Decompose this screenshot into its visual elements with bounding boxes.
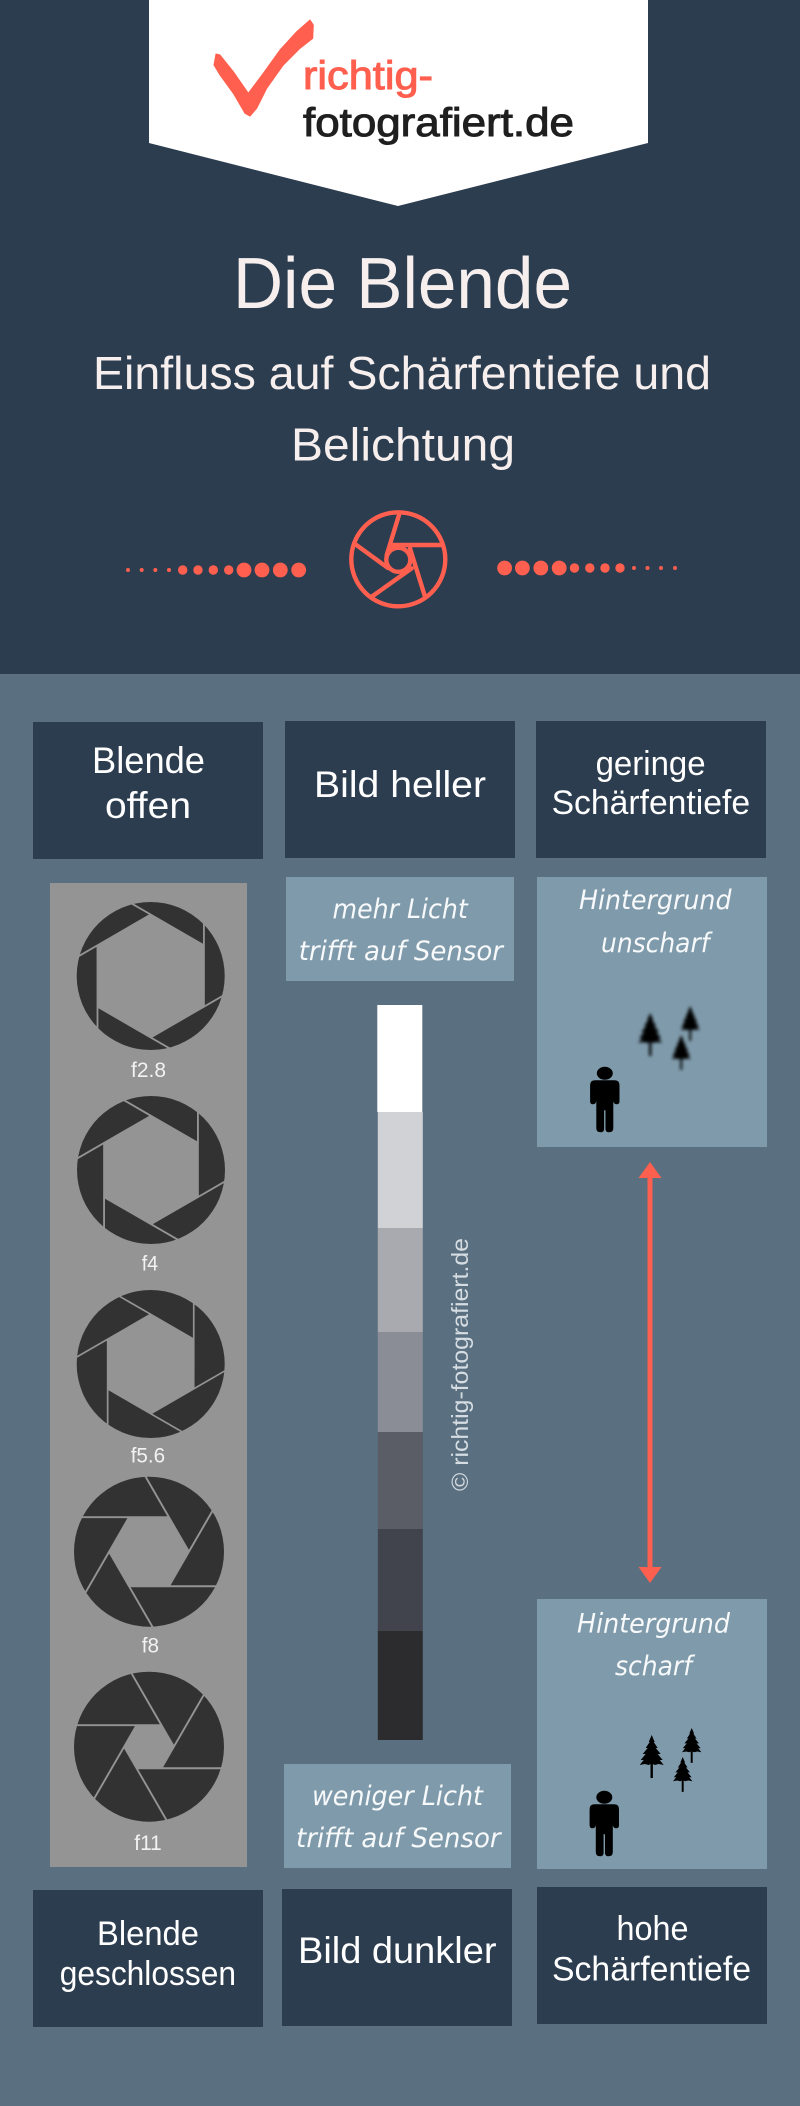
- icon: person: [590, 1791, 619, 1856]
- panel: geringe Schärfentiefe: geringe: [596, 745, 706, 783]
- panel: hohe Schärfentiefe: Schärfentiefe: [552, 1951, 751, 1989]
- callout: mehr Licht: [286, 877, 514, 981]
- panel: Hintergrund scharf: scharf: [615, 1651, 695, 1682]
- aperture f2.8: [76, 902, 225, 1077]
- dots left: [126, 563, 306, 577]
- panel: hohe Schärfentiefe: hohe: [616, 1910, 688, 1948]
- aperture f8: f8: [142, 1635, 159, 1658]
- panel: Blende geschlossen: Blende: [97, 1915, 199, 1953]
- panel: Blende offen: offen: [105, 785, 191, 826]
- aperture f2.8: f2.8: [131, 1059, 166, 1082]
- panel: Hintergrund scharf: [537, 1599, 767, 1869]
- aperture f4: [77, 1096, 225, 1270]
- panel: Bild heller: [285, 721, 515, 858]
- aperture f5.6: [76, 1290, 225, 1462]
- panel: Blende geschlossen: geschlossen: [60, 1955, 236, 1993]
- subtitle: [93, 347, 711, 470]
- panel: geringe Schärfentiefe: Schärfentiefe: [552, 784, 750, 822]
- logo text: fotografiert.de: [303, 101, 574, 145]
- callout: mehr Licht: mehr Licht: [332, 894, 469, 925]
- panel: Blende offen: [33, 722, 263, 859]
- panel: Bild dunkler: [282, 1889, 512, 2026]
- subtitle: Belichtung: [291, 418, 515, 470]
- icon: person: [590, 1067, 620, 1132]
- header band: [0, 0, 800, 674]
- logo text: [303, 54, 574, 145]
- logo text: richtig-: [303, 54, 433, 98]
- panel: Hintergrund unscharf: [537, 877, 767, 1147]
- callout: weniger Licht: trifft auf Sensor: [296, 1823, 502, 1854]
- copyright watermark: © richtig-fotografiert.de: [447, 1238, 473, 1491]
- panel: Bild dunkler: Bild dunkler: [298, 1930, 496, 1971]
- aperture f8: [74, 1476, 224, 1652]
- panel: Hintergrund unscharf: Hintergrund: [579, 885, 732, 916]
- aperture f11: f11: [134, 1832, 162, 1855]
- panel: Hintergrund scharf: Hintergrund: [577, 1609, 731, 1640]
- title: Die Blende: [233, 244, 572, 324]
- callout: weniger Licht: [284, 1764, 511, 1868]
- icon: blurred trees: [638, 1006, 700, 1070]
- panel: geringe Schärfentiefe: [536, 721, 766, 858]
- panel: hohe Schärfentiefe: [537, 1887, 767, 2024]
- aperture f11: [74, 1672, 224, 1850]
- aperture f5.6: f5.6: [131, 1445, 165, 1468]
- callout: weniger Licht: weniger Licht: [312, 1781, 484, 1812]
- brightness scale: [377, 1005, 423, 1740]
- panel: Bild heller: Bild heller: [314, 764, 486, 805]
- panel: Blende offen: Blende: [92, 740, 205, 781]
- logo banner: [149, 0, 648, 206]
- icon: aperture: [351, 512, 445, 606]
- panel: Blende geschlossen: [33, 1890, 263, 2027]
- aperture f4: f4: [142, 1253, 159, 1276]
- arrow: double-headed depth of field: [638, 1162, 662, 1583]
- icon: sharp trees: [640, 1728, 701, 1792]
- icon: logo check mark: [214, 20, 313, 116]
- panel: aperture column: [50, 883, 247, 1867]
- subtitle: Einfluss auf Schärfentiefe und: [93, 347, 711, 399]
- panel: Hintergrund unscharf: unscharf: [601, 928, 713, 959]
- callout: mehr Licht: trifft auf Sensor: [299, 936, 505, 967]
- dots right: [497, 561, 677, 575]
